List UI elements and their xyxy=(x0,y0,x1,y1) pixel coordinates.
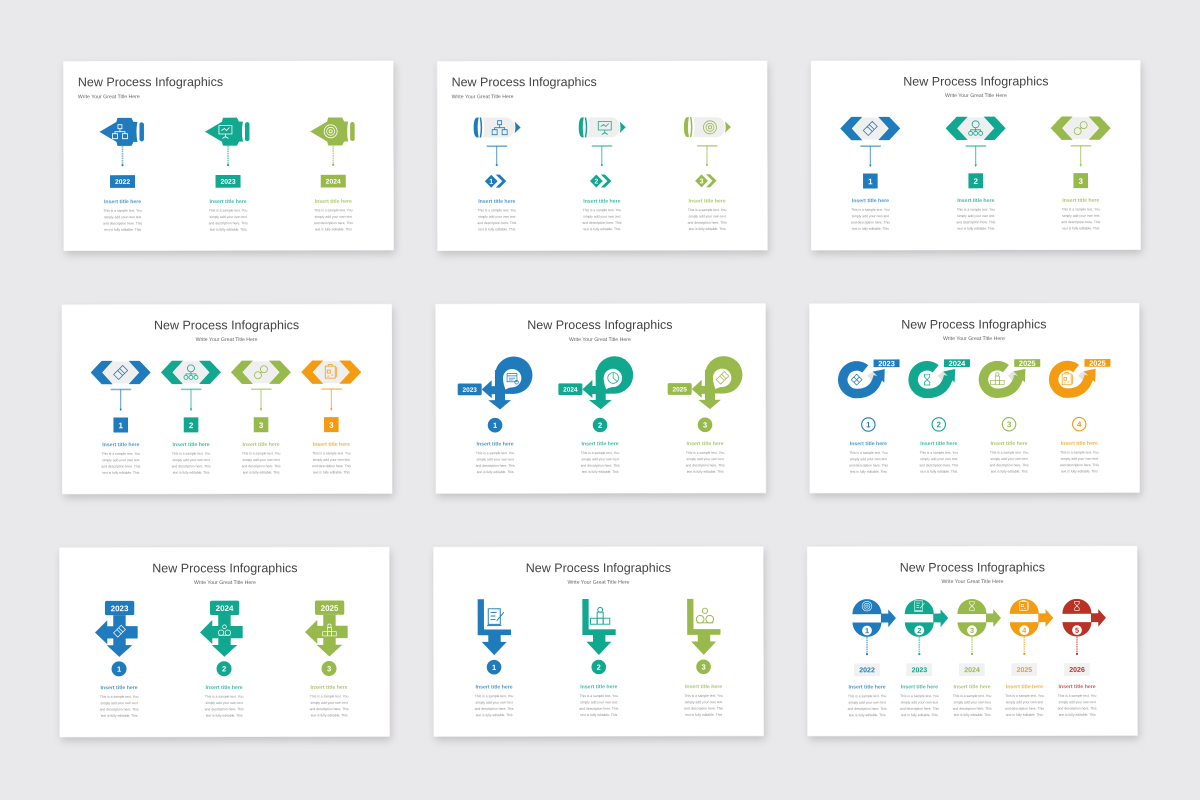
title: New Process Infographics xyxy=(901,317,1046,332)
step 2023 xyxy=(458,356,533,474)
item text: simply add your own text xyxy=(583,215,621,219)
item text: text is fully editable. This xyxy=(1061,469,1098,473)
icon: ring arrow: 2023 xyxy=(878,359,895,368)
T connector xyxy=(1071,146,1091,167)
number square: 3 xyxy=(259,421,264,430)
item text: and description here. This xyxy=(990,463,1029,467)
icon: double chevron xyxy=(91,361,151,384)
item title: Insert title here xyxy=(102,442,139,448)
item text: and description here. This xyxy=(310,707,349,711)
step 2024 xyxy=(952,599,1001,717)
item text: text is fully editable. This xyxy=(685,713,722,717)
year badge: 2023 xyxy=(220,179,236,186)
item text: simply add your own text xyxy=(100,701,138,705)
item text: This is a sample text. You xyxy=(953,694,991,698)
subtitle: Write Your Great Title Here xyxy=(945,93,1007,99)
icon: double chevron xyxy=(840,117,900,140)
number square: 1 xyxy=(868,177,873,186)
subtitle: Write Your Great Title Here xyxy=(943,336,1005,342)
icon: loop arrow with year tag: 2024 xyxy=(563,387,578,394)
item text: simply add your own text xyxy=(920,457,958,461)
icon: split circle arrow: 3 xyxy=(970,626,974,635)
dotted connector xyxy=(1076,637,1078,655)
item text: This is a sample text. You xyxy=(1062,207,1100,211)
item text: This is a sample text. You xyxy=(312,451,351,455)
item text: and description here. This xyxy=(849,463,888,468)
item title: Insert title here xyxy=(172,442,210,448)
item text: text is fully editable. This xyxy=(206,714,243,718)
year box: 2023 xyxy=(912,667,927,674)
panel 2: capsule arrows xyxy=(437,61,767,251)
number circle: 3 xyxy=(703,421,707,430)
item text: text is fully editable. This xyxy=(583,227,621,231)
subtitle: Write Your Great Title Here xyxy=(941,579,1003,585)
item text: text is fully editable. This xyxy=(901,713,938,717)
panel 4: double chevrons, four steps xyxy=(62,304,392,494)
item text: and description here. This xyxy=(209,221,248,225)
item text: simply add your own text xyxy=(205,701,243,705)
chevron number: 2 xyxy=(594,179,598,186)
item text: This is a sample text. You xyxy=(688,208,726,212)
title: New Process Infographics xyxy=(154,318,299,332)
item text: text is fully editable. This xyxy=(1059,713,1096,717)
item text: simply add your own text xyxy=(580,700,618,704)
item text: This is a sample text. You xyxy=(990,451,1028,455)
item text: This is a sample text. You xyxy=(684,694,723,698)
icon: rocket arrow xyxy=(205,118,249,146)
item text: text is fully editable. This xyxy=(210,228,247,232)
T connector xyxy=(966,146,986,167)
item text: text is fully editable. This xyxy=(957,227,995,231)
item title: Insert title here xyxy=(100,685,138,691)
item text: text is fully editable. This xyxy=(102,471,140,475)
item text: simply add your own text xyxy=(172,458,210,462)
item text: This is a sample text. You xyxy=(900,694,939,698)
item title: Insert title here xyxy=(1058,684,1096,690)
item text: and description here. This xyxy=(1061,220,1101,224)
item text: simply add your own text xyxy=(686,457,724,461)
item title: Insert title here xyxy=(583,199,621,205)
number square: 3 xyxy=(329,421,334,430)
item text: text is fully editable. This xyxy=(920,470,958,474)
icon: L arrow xyxy=(687,599,721,655)
item text: This is a sample text. You xyxy=(849,451,888,455)
item text: text is fully editable. This xyxy=(311,713,348,717)
year box: 2024 xyxy=(964,667,980,674)
step 3 xyxy=(684,117,731,231)
chevron number: 3 xyxy=(700,178,704,185)
item text: and description here. This xyxy=(476,464,515,468)
item text: and description here. This xyxy=(579,707,619,711)
icon: capsule xyxy=(684,117,731,137)
step 2 xyxy=(579,599,619,717)
item title: Insert title here xyxy=(478,199,515,205)
step 2026 xyxy=(1057,599,1106,717)
panel 3: double chevrons, three steps xyxy=(811,60,1141,250)
item text: and description here. This xyxy=(103,221,142,226)
icon: L arrow xyxy=(478,599,511,655)
step 2025 xyxy=(305,600,349,717)
item text: simply add your own text xyxy=(688,214,726,218)
item text: This is a sample text. You xyxy=(172,452,210,456)
item text: and description here. This xyxy=(312,464,351,468)
item text: and description here. This xyxy=(242,464,281,468)
step 1 xyxy=(91,361,151,475)
item title: Insert title here xyxy=(1062,198,1099,204)
item text: and description here. This xyxy=(848,707,887,711)
step 2025 second xyxy=(1054,359,1111,473)
item title: Insert title here xyxy=(313,442,350,448)
icon: split circle arrow: 4 xyxy=(1022,626,1027,635)
panel 5: loop pin arrows xyxy=(436,303,766,493)
number circle outline: 3 xyxy=(1007,420,1012,429)
item text: text is fully editable. This xyxy=(313,470,350,474)
panel 6: ring arrows xyxy=(809,303,1140,493)
item text: and description here. This xyxy=(684,706,723,711)
panel 9: split circles, five steps xyxy=(807,546,1137,736)
title: New Process Infographics xyxy=(903,74,1048,89)
T connector xyxy=(592,146,612,166)
item title: Insert title here xyxy=(104,199,141,205)
step 2023 xyxy=(95,601,139,718)
number square: 1 xyxy=(119,421,124,430)
step 2024 xyxy=(913,359,970,474)
step 1 xyxy=(474,599,514,717)
item title: Insert title here xyxy=(581,441,619,447)
item title: Insert title here xyxy=(848,684,886,691)
icon: double chevron xyxy=(231,361,291,384)
item text: text is fully editable. This xyxy=(580,713,618,717)
item text: This is a sample text. You xyxy=(1060,450,1099,455)
T connector xyxy=(860,146,881,167)
item title: Insert title here xyxy=(920,441,957,447)
year box: 2025 xyxy=(1017,667,1032,674)
item text: simply add your own text xyxy=(1061,457,1098,461)
item text: text is fully editable. This xyxy=(478,227,516,231)
item text: This is a sample text. You xyxy=(100,695,138,699)
item text: and description here. This xyxy=(1058,706,1097,711)
T connector xyxy=(111,389,131,411)
icon: capsule xyxy=(579,117,626,137)
item text: This is a sample text. You xyxy=(1005,694,1044,698)
item title: Insert title here xyxy=(953,684,991,690)
year box: 2026 xyxy=(1069,667,1085,674)
title: New Process Infographics xyxy=(526,561,671,575)
item text: This is a sample text. You xyxy=(1058,694,1096,698)
chevron number: 1 xyxy=(489,179,493,186)
dotted connector xyxy=(866,637,868,655)
icon: double chevron xyxy=(1051,116,1111,140)
icon: rocket arrow xyxy=(99,118,144,146)
item text: text is fully editable. This xyxy=(243,471,280,475)
title: New Process Infographics xyxy=(78,75,223,89)
number circle outline: 1 xyxy=(866,420,871,429)
T connector xyxy=(321,389,342,411)
item text: simply add your own text xyxy=(581,457,619,461)
number circle: 3 xyxy=(701,663,706,672)
item text: and description here. This xyxy=(314,221,353,225)
subtitle: Write Your Great Title Here xyxy=(567,580,629,586)
step 1 xyxy=(474,117,521,231)
step 2 xyxy=(946,117,1006,231)
item text: and description here. This xyxy=(1060,463,1099,467)
item title: Insert title here xyxy=(1061,441,1098,447)
item title: Insert title here xyxy=(686,441,724,447)
item title: Insert title here xyxy=(476,441,514,448)
item text: simply add your own text xyxy=(242,458,280,462)
number circle: 2 xyxy=(597,663,601,672)
item text: simply add your own text xyxy=(315,215,352,219)
item text: text is fully editable. This xyxy=(476,713,513,717)
item text: and description here. This xyxy=(900,707,939,711)
step 3 xyxy=(684,599,723,717)
item title: Insert title here xyxy=(209,199,247,205)
item title: Insert title here xyxy=(957,198,994,204)
item text: and description here. This xyxy=(172,464,211,468)
subtitle: Write Your Great Title Here xyxy=(196,337,258,343)
item text: simply add your own text xyxy=(209,215,247,219)
item text: simply add your own text xyxy=(957,214,995,218)
number square: 3 xyxy=(1079,177,1084,186)
item text: This is a sample text. You xyxy=(848,694,886,698)
subtitle: Write Your Great Title Here xyxy=(78,94,140,100)
item text: text is fully editable. This xyxy=(1006,713,1043,717)
item text: and description here. This xyxy=(477,221,517,225)
item text: text is fully editable. This xyxy=(850,470,887,474)
number circle: 2 xyxy=(222,664,226,673)
item text: This is a sample text. You xyxy=(478,208,516,212)
step 1 xyxy=(840,117,900,231)
item text: simply add your own text xyxy=(953,700,991,704)
item text: This is a sample text. You xyxy=(580,694,618,698)
subtitle: Write Your Great Title Here xyxy=(194,580,256,586)
dotted connector xyxy=(332,146,334,166)
item text: This is a sample text. You xyxy=(851,208,890,212)
number circle: 1 xyxy=(117,665,121,674)
item title: Insert title here xyxy=(310,685,348,691)
item text: and description here. This xyxy=(688,221,727,225)
item text: text is fully editable. This xyxy=(689,227,726,231)
icon: double chevron xyxy=(161,361,221,384)
item text: This is a sample text. You xyxy=(314,208,353,212)
item title: Insert title here xyxy=(580,684,617,690)
item text: simply add your own text xyxy=(685,700,722,704)
item text: and description here. This xyxy=(100,707,139,712)
step 2 xyxy=(579,117,626,231)
item text: simply add your own text xyxy=(1006,700,1043,704)
item text: This is a sample text. You xyxy=(102,452,140,456)
item text: This is a sample text. You xyxy=(686,451,724,455)
item text: This is a sample text. You xyxy=(205,695,243,699)
item text: text is fully editable. This xyxy=(477,470,514,474)
year badge: 2024 xyxy=(326,179,341,186)
title: New Process Infographics xyxy=(452,75,597,89)
icon: L arrow xyxy=(582,599,616,655)
item text: simply add your own text xyxy=(478,215,516,219)
item text: simply add your own text xyxy=(1058,700,1096,704)
item text: This is a sample text. You xyxy=(475,694,513,698)
subtitle: Write Your Great Title Here xyxy=(569,337,631,343)
item text: and description here. This xyxy=(686,463,725,467)
number circle: 3 xyxy=(327,664,331,673)
year badge: 2022 xyxy=(115,179,130,186)
icon: double chevron xyxy=(946,117,1006,140)
step 4 xyxy=(301,360,361,474)
icon: capsule xyxy=(474,117,521,138)
step 2024 xyxy=(310,117,355,231)
item title: Insert title here xyxy=(901,684,938,690)
item text: and description here. This xyxy=(956,220,996,224)
number circle: 2 xyxy=(598,421,602,430)
number circle outline: 4 xyxy=(1077,420,1082,429)
item text: This is a sample text. You xyxy=(103,209,142,213)
item text: This is a sample text. You xyxy=(242,452,280,456)
item text: simply add your own text xyxy=(475,701,513,705)
step 2025 xyxy=(983,359,1040,474)
panel 1: rocket arrows xyxy=(63,61,394,251)
item title: Insert title here xyxy=(990,441,1028,447)
step 2024 xyxy=(200,601,244,718)
panel 7: cross arrows xyxy=(59,547,390,737)
item text: text is fully editable. This xyxy=(1062,226,1100,230)
icon: cross arrow with year tag: 2024 xyxy=(216,604,234,613)
item text: simply add your own text xyxy=(476,457,514,462)
icon: split circle arrow: 1 xyxy=(865,626,869,635)
icon: cross arrow with year tag: 2025 xyxy=(321,604,339,613)
item text: simply add your own text xyxy=(852,214,889,218)
item text: This is a sample text. You xyxy=(957,208,995,212)
icon: ring arrow: 2024 xyxy=(949,359,966,368)
step 2023 xyxy=(843,359,900,474)
icon: double chevron xyxy=(301,360,361,384)
item text: text is fully editable. This xyxy=(101,714,138,718)
step 2024 xyxy=(558,356,633,474)
item text: and description here. This xyxy=(851,220,890,225)
number circle: 1 xyxy=(492,663,496,672)
item text: simply add your own text xyxy=(310,701,348,705)
item text: This is a sample text. You xyxy=(920,451,958,455)
item text: and description here. This xyxy=(1005,707,1044,711)
item title: Insert title here xyxy=(205,685,243,691)
icon: loop arrow with year tag: 2023 xyxy=(462,387,477,394)
dotted connector xyxy=(121,146,124,166)
dotted connector xyxy=(971,637,973,655)
item text: and description here. This xyxy=(475,707,514,711)
item text: and description here. This xyxy=(101,464,141,469)
item text: This is a sample text. You xyxy=(583,208,621,212)
item text: text is fully editable. This xyxy=(852,227,889,231)
step 2023 xyxy=(900,599,948,717)
item title: Insert title here xyxy=(688,198,726,205)
icon: cross arrow with year tag: 2023 xyxy=(111,604,129,613)
number square: 2 xyxy=(189,421,194,430)
item text: simply add your own text xyxy=(1062,214,1100,218)
item text: simply add your own text xyxy=(850,457,887,461)
item text: and description here. This xyxy=(919,463,959,467)
item text: This is a sample text. You xyxy=(581,451,619,455)
item text: This is a sample text. You xyxy=(209,208,247,213)
dotted connector xyxy=(918,637,920,655)
T connector xyxy=(181,389,202,411)
number circle outline: 2 xyxy=(937,420,942,429)
item title: Insert title here xyxy=(852,198,889,204)
item text: simply add your own text xyxy=(901,700,938,705)
icon: loop arrow with year tag: 2025 xyxy=(672,386,687,393)
step 3 xyxy=(1051,116,1111,230)
item text: simply add your own text xyxy=(313,458,350,462)
T connector xyxy=(697,146,718,166)
title: New Process Infographics xyxy=(527,318,672,332)
dotted connector xyxy=(1023,637,1025,655)
number circle: 1 xyxy=(493,421,497,430)
item title: Insert title here xyxy=(475,684,513,691)
item text: text is fully editable. This xyxy=(582,470,619,474)
item title: Insert title here xyxy=(242,442,280,448)
year box: 2022 xyxy=(859,667,875,674)
item text: and description here. This xyxy=(205,707,244,711)
icon: ring arrow: 2025 xyxy=(1089,359,1106,368)
item text: This is a sample text. You xyxy=(476,451,514,455)
step 2 xyxy=(161,361,221,475)
step 2025 xyxy=(668,356,743,474)
item text: simply add your own text xyxy=(104,215,141,219)
title: New Process Infographics xyxy=(152,561,297,575)
item text: simply add your own text xyxy=(848,701,886,705)
item title: Insert title here xyxy=(850,441,887,447)
step 2025 xyxy=(1005,599,1053,717)
item text: and description here. This xyxy=(953,707,992,711)
icon: split circle arrow: 5 xyxy=(1075,626,1079,635)
step 3 xyxy=(231,361,291,475)
panel 8: L-shaped arrows xyxy=(433,546,764,736)
step 2023 xyxy=(205,118,250,232)
icon: ring arrow: 2025 xyxy=(1019,359,1036,368)
item text: text is fully editable. This xyxy=(991,470,1028,474)
step 2022 xyxy=(99,118,144,232)
icon: split circle arrow: 2 xyxy=(917,626,921,635)
subtitle: Write Your Great Title Here xyxy=(452,94,514,100)
item text: This is a sample text. You xyxy=(310,694,348,698)
item text: text is fully editable. This xyxy=(173,471,210,475)
item title: Insert title here xyxy=(315,199,352,205)
item text: and description here. This xyxy=(581,464,620,468)
item title: Insert title here xyxy=(1006,684,1043,690)
number square: 2 xyxy=(974,177,979,186)
item text: text is fully editable. This xyxy=(315,227,352,231)
item text: simply add your own text xyxy=(102,458,140,462)
item text: text is fully editable. This xyxy=(687,470,724,474)
T connector xyxy=(251,389,272,411)
title: New Process Infographics xyxy=(900,560,1045,575)
step 2022 xyxy=(847,599,896,717)
item text: simply add your own text xyxy=(990,457,1028,461)
dotted connector xyxy=(227,146,229,166)
item text: and description here. This xyxy=(582,221,622,225)
T connector xyxy=(487,146,507,166)
icon: rocket arrow xyxy=(310,117,355,146)
item text: text is fully editable. This xyxy=(954,713,991,717)
item text: text is fully editable. This xyxy=(104,228,141,232)
item text: text is fully editable. This xyxy=(849,713,886,717)
item title: Insert title here xyxy=(685,684,722,690)
